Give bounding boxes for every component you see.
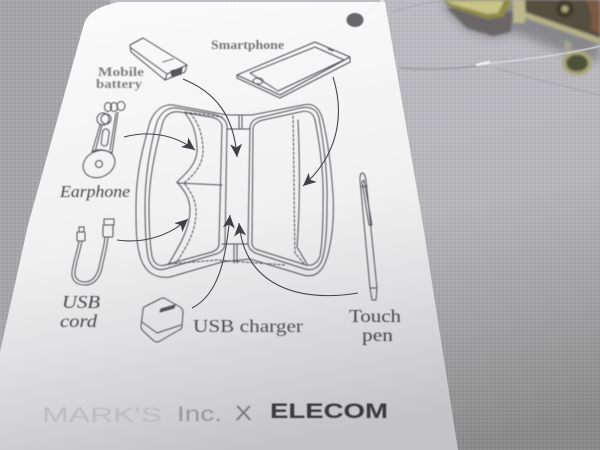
icon: smartphone [237,42,350,98]
arrow: smartphone to case [303,77,338,186]
tag punch hole with thread [346,0,384,27]
metal clasp at top right [443,0,600,74]
label: USB cord: cord [60,311,98,331]
arrow: USB charger to case [192,215,230,308]
arrow: touch pen to case [239,223,358,296]
label: Mobile battery [96,64,144,91]
icon: USB cord [72,219,114,285]
label: Earphone: Earphone [59,182,130,201]
illustration: zip case open [136,104,333,277]
label: Mobile battery: Mobile [98,64,144,79]
arrow: mobile battery to case [183,79,237,157]
illustration line art [72,38,377,342]
icon: USB charger [141,298,183,342]
labels [59,37,401,345]
icon: mobile battery [130,38,187,80]
label: Mobile battery: battery [96,76,143,91]
icon: touch pen [360,173,377,300]
label: USB charger: USB charger [193,316,303,336]
label: Smartphone: Smartphone [211,37,284,52]
paper tag [0,2,458,450]
clear thread on fabric [392,0,600,95]
label: Touch pen: pen [362,325,393,345]
brand: Inc.: Inc. [177,403,222,426]
label: USB cord [60,292,100,331]
brand: X: X [235,403,252,425]
arrows [117,77,358,308]
brand: ELECOM: ELECOM [270,400,388,423]
brand line [42,400,388,427]
brand: MARK'S: MARK'S [42,404,162,427]
arrow: USB cord to case [117,219,188,241]
label: USB cord: USB [62,292,100,312]
label: Touch pen: Touch [349,306,401,326]
icon: earphone [79,102,125,183]
arrow: earphone to case [124,134,195,150]
label: Touch pen [349,306,401,345]
